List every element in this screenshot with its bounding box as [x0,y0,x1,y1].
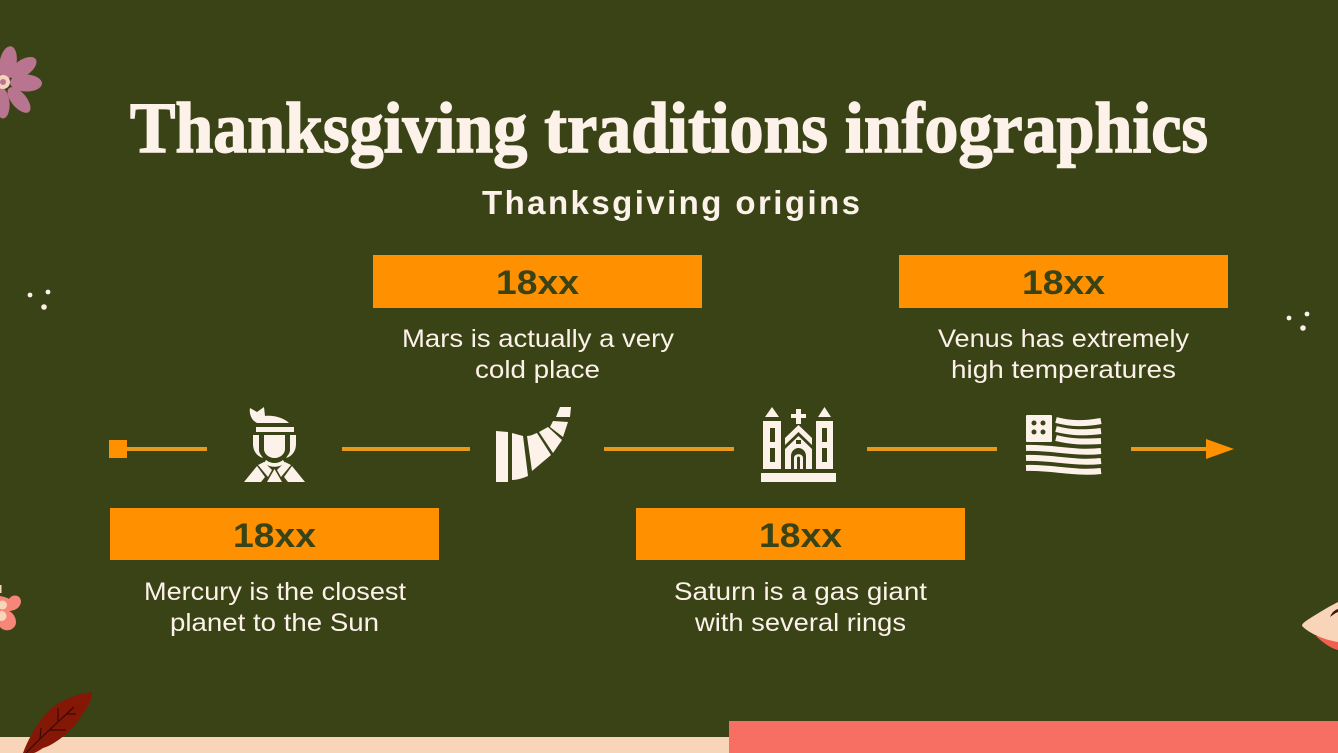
title: Thanksgiving traditions infographics [130,88,1208,168]
panel: Saturn [636,508,965,637]
timeline: segment 2 [604,447,734,451]
decoration: white dots right [1287,312,1309,331]
year bar [899,255,1228,308]
icon: pilgrim person [244,407,305,482]
right tower [816,421,833,469]
timeline: segment 1 [342,447,470,451]
panel: Mercury [110,508,439,637]
bottom beige band [0,737,729,753]
timeline: segment 3 [867,447,997,451]
description: Mercury is the closest [144,578,406,606]
timeline: end arrow [1131,439,1234,459]
year bar [636,508,965,560]
subtitle: Thanksgiving origins [482,184,860,221]
decoration: red leaf [23,692,92,753]
icon: american flag [1026,415,1101,472]
description: Mars is actually a very [402,325,675,353]
panel: Venus [899,255,1228,384]
description: Venus has extremely [938,325,1190,353]
year: 18xx [759,517,842,555]
decoration: pink flower [0,45,42,119]
description [674,578,927,637]
panel: Mars [373,255,702,384]
year bar [373,255,702,308]
description [938,325,1190,384]
nave [785,425,812,445]
decoration: coral flower [0,585,21,630]
year: 18xx [496,264,579,302]
bottom coral band [729,721,1338,753]
description: with several rings [694,609,906,637]
timeline: start marker [109,440,207,458]
decoration: white dots left [28,290,50,310]
left tower [763,421,781,469]
year: 18xx [233,517,316,555]
year: 18xx [1022,264,1105,302]
icon: cornucopia [496,407,571,482]
description: cold place [475,356,600,384]
decoration: pie slice [1302,602,1338,650]
cross [791,409,806,424]
description [144,578,406,637]
icon: church [761,407,836,482]
description [402,325,675,384]
description: Saturn is a gas giant [674,578,927,606]
description: planet to the Sun [170,609,379,637]
description: high temperatures [951,356,1176,384]
year bar [110,508,439,560]
